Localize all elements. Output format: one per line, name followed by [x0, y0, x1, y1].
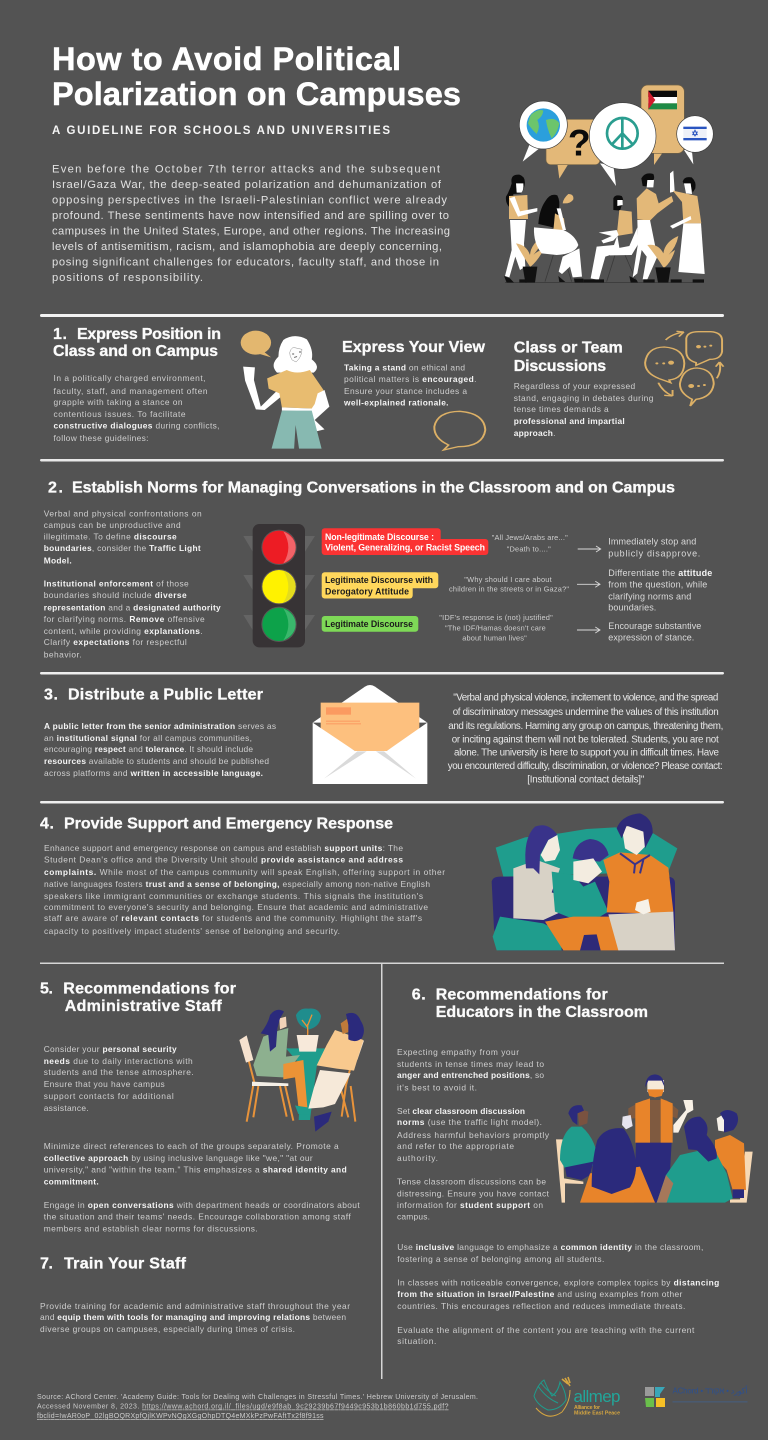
text block: open conversations: the situation and their teams' needs. Encourage collaboration among staff — [44, 1212, 351, 1222]
heading: Distribute a Public Letter — [68, 686, 263, 704]
text block: class discussions: stand, engaging in debates during — [514, 393, 654, 403]
intro paragraph: opposing perspectives in the Israeli-Palestinian conflict were already — [52, 194, 447, 206]
panel: 2 establish norms — [44, 480, 712, 660]
foreground woman with orange top — [580, 1128, 655, 1203]
label: non-legitimate discourse — [322, 528, 488, 555]
logo: allmep: Alliance for — [574, 1405, 600, 1411]
intro paragraph: Even before the October 7th terror attacks and the subsequent — [52, 164, 441, 176]
text block: for clarifying norms. Remove offensive — [44, 614, 205, 624]
text block: support: information for student support on — [397, 1200, 543, 1210]
green lamp — [261, 607, 297, 642]
text block: class discussions: tense times demands a — [514, 404, 609, 414]
seated woman right — [715, 1110, 746, 1198]
text block: native languages fosters trust and a sense of belonging, especially among non-native English — [44, 879, 430, 889]
traffic light — [243, 524, 315, 647]
standing teacher — [622, 1074, 693, 1203]
yellow lamp — [261, 569, 297, 604]
heading: 1. — [53, 326, 67, 343]
heading — [53, 326, 221, 360]
label: non-legitimate discourse: Non-legitimate Discourse : — [325, 532, 434, 542]
left woman — [253, 1010, 311, 1115]
heading: 7. — [40, 1256, 53, 1272]
panel: 3 public letter — [44, 685, 723, 785]
heading: Express Position in — [77, 326, 221, 343]
heading: Train Your Staff — [64, 1256, 187, 1272]
text block: Enhance support and emergency response on campus and establish support units: The — [44, 843, 403, 853]
hero illustration: people talking with speech bubbles — [504, 85, 713, 283]
text block: Model. — [44, 556, 72, 566]
icon: question mark bubble: ? — [568, 121, 591, 163]
text block: security: support contacts for additional — [44, 1091, 174, 1101]
text block: open conversations: Engage in open conversations with department heads or coordinators about — [44, 1200, 360, 1210]
text block: security: Ensure that you have campus — [44, 1079, 165, 1089]
text block: collective approach — [44, 1141, 347, 1186]
heading: class or team — [514, 340, 623, 375]
heading — [40, 980, 236, 1015]
intro paragraph: campuses in the United States, Europe, and other regions. The increasing — [52, 226, 450, 238]
logo: achord — [645, 1386, 748, 1407]
divider — [40, 314, 724, 317]
heading: Class and on Campus — [53, 343, 218, 360]
text block — [44, 721, 276, 778]
text block: class discussions — [514, 381, 654, 438]
logo: achord: AChord • أكورد • אקורד — [672, 1386, 748, 1396]
text block: boundaries should include diverse — [44, 590, 187, 600]
label: derogatory attitude: Legitimate Discourse with — [325, 575, 433, 585]
text block: faculty, staff, and management often — [54, 386, 208, 396]
responses: Differentiate the attitude — [608, 568, 712, 578]
heading: 3. — [44, 686, 58, 704]
responses — [608, 536, 712, 643]
label: derogatory attitude — [322, 572, 438, 598]
text block: contentious issues. To facilitate — [54, 409, 186, 419]
text block: staff are aware of relevant contacts for students and the community. Highlight the staff's — [44, 913, 422, 923]
text block: security: needs due to daily interactions with — [44, 1056, 193, 1066]
divider and column split — [40, 962, 724, 1379]
quote: public letter: alone. The university is here to support you in difficult times. Have — [454, 748, 720, 758]
text block: follow these guidelines: — [54, 433, 148, 443]
text block: norms — [397, 1106, 550, 1163]
example quotes: about human lives" — [462, 634, 527, 642]
text block: security: students and the tense atmosphere. — [44, 1067, 194, 1077]
icon: envelope — [313, 685, 427, 784]
text block: alignment: Evaluate the alignment of the content you are teaching with the current — [397, 1325, 695, 1335]
text block — [40, 1301, 350, 1334]
example quotes: children in the streets or in Gaza?" — [449, 584, 569, 594]
child — [545, 839, 620, 950]
illustration: woman with speech bubble — [241, 331, 329, 449]
text block: class discussions: Regardless of your expressed — [514, 381, 636, 391]
heading: class or team: Discussions — [514, 358, 606, 375]
text block: norms: Set clear classroom discussion — [397, 1106, 525, 1116]
text block: security — [44, 1044, 194, 1113]
icon: question mark bubble — [546, 119, 600, 179]
heading: 2. — [48, 480, 63, 496]
logo: allmep — [534, 1377, 620, 1416]
source citation — [37, 1394, 478, 1420]
text block: alignment: situation. — [397, 1336, 436, 1346]
subtitle: A GUIDELINE FOR SCHOOLS AND UNIVERSITIES — [52, 125, 390, 137]
text block: collective approach: university," and "within the team." This emphasizes a shared identity and — [44, 1164, 347, 1174]
quote: public letter: of discriminatory messages undermine the values of this institution — [453, 707, 719, 718]
example quotes: "IDF's response is (not) justified" — [439, 613, 553, 622]
text block: inclusive language: Use inclusive language to emphasize a common identity in the classroom, — [397, 1242, 703, 1252]
label: non-legitimate discourse: Violent, Generalizing, or Racist Speech — [325, 542, 485, 552]
text block: empathy: Expecting empathy from your — [397, 1047, 519, 1057]
text block: illegitimate. To define discourse — [44, 532, 177, 542]
text block: distancing — [397, 1278, 719, 1311]
text block: support — [397, 1176, 550, 1222]
text block: behavior. — [44, 650, 82, 660]
intro paragraph — [52, 164, 450, 284]
heading: class or team: Class or Team — [514, 340, 623, 356]
label: derogatory attitude: Derogatory Attitude — [325, 586, 409, 596]
text block: class discussions: approach. — [514, 428, 555, 438]
foreground woman with teal top — [657, 1117, 733, 1203]
text block — [54, 373, 220, 443]
text block: empathy: it's best to avoid it. — [397, 1082, 477, 1092]
text block: norms: norms (use the traffic light model). — [397, 1117, 542, 1127]
text block: commitment to everyone's security and belonging. Ensure that academic and administrative — [44, 902, 428, 912]
text block: norms: authority. — [397, 1153, 438, 1163]
responses: Immediately stop and — [608, 536, 696, 546]
heading: Recommendations for — [63, 980, 236, 998]
right woman — [308, 1013, 364, 1132]
responses: publicly disapprove. — [608, 548, 700, 558]
heading: Administrative Staff — [65, 998, 222, 1015]
person 2 — [534, 195, 583, 283]
plant left — [516, 235, 545, 283]
heading: 4. — [40, 816, 54, 832]
example quotes: "The IDF/Hamas doesn't care — [445, 624, 546, 632]
example quotes — [439, 533, 569, 642]
text block: representation and a designated authority — [44, 602, 221, 612]
seated man left — [560, 1105, 597, 1180]
panel: 4 support and emergency — [40, 813, 677, 950]
intro paragraph: profound. These sentiments have now intensified and are spilling over to — [52, 210, 449, 222]
text block: In a politically charged environment, — [54, 373, 206, 383]
logo: allmep: Middle East Peace — [574, 1410, 620, 1416]
text block: collective approach: collective approach by using inclusive language like "we," "at our — [44, 1153, 313, 1163]
intro paragraph: levels of antisemitism, racism, and islamophobia are deeply concerning, — [52, 241, 442, 253]
icon: outline speech bubble — [434, 411, 485, 450]
text block: content, while providing explanations. — [44, 626, 203, 636]
heading — [412, 986, 648, 1021]
divider — [40, 801, 724, 804]
quote: public letter: or inciting against them will not be tolerated. Students, you are not — [452, 734, 719, 746]
text block: Student Dean's office and the Diversity Unit should provide assistance and address — [44, 854, 403, 864]
icon: conversation bubbles with arrows — [645, 331, 724, 406]
example quotes: "Death to...." — [507, 544, 551, 554]
icon: peace sign bubble — [589, 103, 656, 186]
label: legitimate discourse — [322, 616, 418, 632]
title: Polarization on Campuses — [52, 76, 461, 112]
people group — [504, 171, 705, 283]
illustration: classroom group — [556, 1074, 753, 1203]
text block: class discussions: professional and impartial — [514, 416, 625, 426]
text block: across platforms and written in accessible language. — [44, 768, 263, 778]
title — [52, 41, 461, 112]
text block: inclusive language — [397, 1242, 703, 1264]
text block: distancing: In classes with noticeable convergence, explore complex topics by distancing — [397, 1278, 719, 1288]
text block: Provide training for academic and administrative staff throughout the year — [40, 1301, 350, 1311]
text block: Verbal and physical confrontations on — [44, 508, 202, 518]
quote: public letter: "Verbal and physical violence, incitement to violence, and the spread — [453, 692, 718, 704]
plant right — [647, 236, 678, 283]
text block: boundaries, consider the Traffic Light — [44, 543, 201, 553]
icon: Palestinian flag bubble — [641, 85, 684, 165]
text block — [44, 508, 221, 660]
text block: norms: Address harmful behaviors promptly — [397, 1130, 550, 1140]
divider — [40, 459, 724, 462]
text block: Institutional enforcement of those — [44, 578, 189, 588]
text block: distancing: from the situation in Israel/Palestine and using examples from other — [397, 1289, 683, 1299]
heading: Recommendations for — [436, 986, 608, 1004]
woman — [493, 825, 579, 950]
responses: boundaries. — [608, 603, 656, 613]
responses: expression of stance. — [608, 633, 694, 643]
label: legitimate discourse: Legitimate Discourse — [325, 619, 413, 629]
text block: open conversations — [44, 1200, 360, 1234]
person 1 — [504, 175, 537, 283]
person 3 — [583, 195, 639, 283]
intro paragraph: positions of responsibility. — [52, 272, 203, 284]
icon: Israeli flag bubble — [677, 116, 713, 164]
table and plant — [286, 1008, 325, 1120]
title: How to Avoid Political — [52, 41, 401, 77]
icon: globe bubble — [519, 101, 567, 162]
text block: empathy: students in tense times may lead to — [397, 1059, 544, 1069]
responses: from the question, while — [608, 580, 707, 590]
responses: clarifying norms and — [608, 591, 691, 601]
quote: public letter: and its regulations. Harming any group on campus, threatening them, — [448, 721, 723, 732]
text block: empathy: anger and entrenched positions, so — [397, 1070, 544, 1080]
illustration: family comforting a child — [492, 813, 677, 950]
panel: 5 administrative staff — [40, 980, 364, 1234]
person 5 — [670, 171, 705, 283]
arrows — [577, 546, 601, 633]
heading: 5. — [40, 980, 53, 998]
text block: security: Consider your personal security — [44, 1044, 177, 1054]
text block: express your view: political matters is encouraged. — [344, 374, 476, 384]
heading: express your view: Express Your View — [342, 339, 486, 356]
text block: norms: and refer to the appropriate — [397, 1141, 514, 1151]
divider — [40, 672, 724, 674]
text block: express your view: Ensure your stance includes a — [344, 386, 467, 396]
text block: A public letter from the senior administration serves as — [44, 721, 276, 731]
intro paragraph: posing significant challenges for educators, faculty staff, and those in — [52, 256, 439, 268]
text block: campus can be unproductive and — [44, 520, 181, 530]
text block: grapple with taking a stance on — [54, 397, 183, 407]
icon: small tan bubble — [563, 194, 573, 203]
text block: express your view — [343, 362, 476, 408]
person 4 — [629, 173, 673, 283]
text block: security: assistance. — [44, 1103, 89, 1113]
quote: public letter: you encountered difficulty, discrimination, or violence? Please contact: — [448, 761, 723, 772]
text block: constructive dialogues during conflicts, — [54, 420, 220, 430]
logo: allmep: allmep — [574, 1387, 620, 1406]
text block: empathy — [397, 1047, 544, 1092]
text block: support: Tense classroom discussions can be — [397, 1176, 546, 1186]
intro paragraph: Israel/Gaza War, the deep-seated polarization and dehumanization of — [52, 179, 442, 191]
heading: Educators in the Classroom — [436, 1004, 648, 1021]
quote: public letter: [Institutional contact details]" — [527, 774, 645, 785]
text block: express your view: Taking a stand on ethical and — [344, 362, 465, 372]
text block: diverse groups on campuses, especially during times of crisis. — [40, 1324, 295, 1334]
source citation: Accessed November 8, 2023. https://www.achord.org.il/_files/ugd/e9f8ab_9c29239b67f9449c953b1b860bb1d755.pdf? — [37, 1404, 449, 1410]
heading: Establish Norms for Managing Conversations in the Classroom and on Campus — [72, 480, 675, 496]
illustration: two women at a table — [239, 1008, 364, 1132]
text block: support: campus. — [397, 1212, 430, 1222]
quote: public letter — [448, 692, 723, 785]
text block: open conversations: members and establish clear norms for discussions. — [44, 1224, 258, 1234]
heading: Provide Support and Emergency Response — [64, 816, 393, 832]
text block: Clarify expectations for respectful — [44, 637, 187, 647]
source citation: Source: AChord Center. 'Academy Guide: Tools for Dealing with Challenges in Stressful Times.' Hebrew University of Jerusalem. — [37, 1394, 478, 1401]
text block: an institutional signal for all campus communities, — [44, 733, 252, 743]
text block: resources available to students and should be published — [44, 756, 269, 766]
text block: inclusive language: fostering a sense of belonging among all students. — [397, 1254, 604, 1264]
text block: collective approach: Minimize direct references to each of the groups separately. Promote a — [44, 1141, 339, 1151]
text block: speakers like immigrant communities or exchange students. This signals the institution's — [44, 891, 423, 901]
heading: 6. — [412, 986, 426, 1004]
text block: distancing: countries. This encourages reflection and reduces immediate threats. — [397, 1301, 685, 1311]
text block: complaints. While most of the campus community will speak English, offering support in other — [44, 867, 445, 877]
text block: capacity to positively impact students' sense of belonging and security. — [44, 926, 340, 936]
panel: 7 train your staff — [40, 1256, 350, 1334]
example quotes: "Why should I care about — [464, 575, 552, 584]
text block: encouraging respect and tolerance. It should include — [44, 744, 253, 754]
text block: support: distressing. Ensure you have contact — [397, 1188, 550, 1198]
text block: alignment — [397, 1325, 695, 1346]
red lamp — [261, 530, 297, 565]
text block: and equip them with tools for managing and improving relations between — [40, 1312, 346, 1322]
panel: 1 express position — [53, 326, 724, 450]
example quotes: "All Jews/Arabs are..." — [492, 533, 568, 542]
responses: Encourage substantive — [608, 621, 701, 631]
text block: collective approach: commitment. — [44, 1176, 99, 1186]
text block: express your view: well-explained rationale. — [343, 398, 448, 408]
text block — [44, 843, 445, 936]
source citation: fbclid=IwAR0oP_02lgBOQRXpfQjlKWPvNQgXGgOhpDTQ4eMXkPzPwFAftTx2f8f91ss — [37, 1413, 324, 1420]
man — [603, 813, 675, 950]
panel: 6 educators — [397, 986, 753, 1346]
